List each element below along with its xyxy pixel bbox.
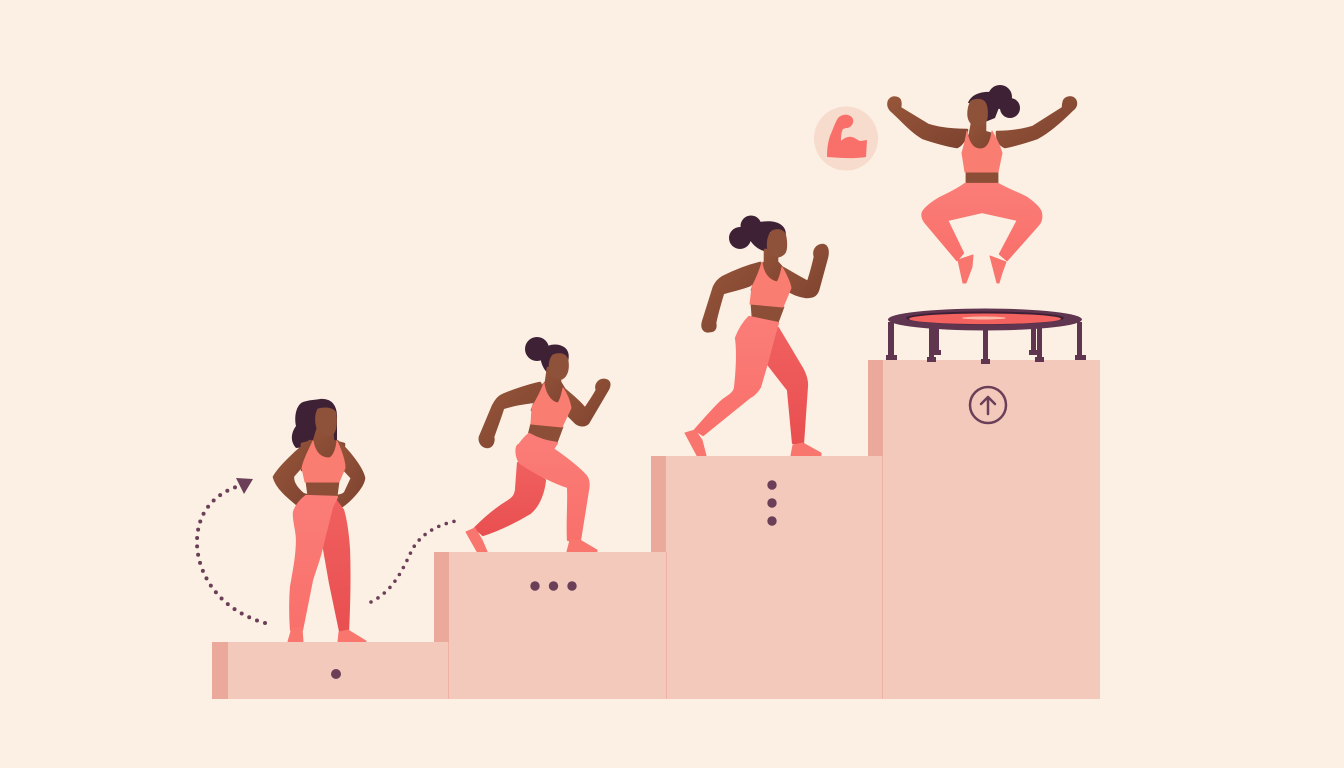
step 1 block <box>212 642 435 699</box>
front arm <box>564 380 609 425</box>
trampoline frame <box>888 308 1082 330</box>
step 3 marker: three vertical dots <box>767 480 777 526</box>
feet <box>288 628 366 642</box>
sports bra <box>750 262 791 307</box>
trampoline legs <box>886 322 1086 364</box>
sports bra <box>962 131 1002 172</box>
right arm <box>333 441 364 506</box>
feet <box>958 255 1006 283</box>
front leg <box>695 317 778 435</box>
back leg <box>767 328 807 443</box>
neck and torso <box>532 368 571 410</box>
figure 1: standing hands on hips <box>274 399 366 642</box>
step 1 marker: one dot <box>331 669 341 679</box>
back leg <box>475 463 545 535</box>
face <box>316 408 336 436</box>
face <box>549 354 568 379</box>
face <box>968 99 987 126</box>
hair <box>292 399 337 448</box>
trampoline mat <box>909 314 1061 324</box>
feet <box>685 430 821 456</box>
trampoline <box>886 308 1086 364</box>
feet <box>466 528 597 552</box>
step 2 block <box>434 552 652 699</box>
mat highlight <box>962 316 1006 320</box>
figure 3: striding up <box>685 216 828 456</box>
dotted curve between first and second figure <box>371 521 456 602</box>
step 2 marker: three dots <box>530 581 577 591</box>
hair <box>968 85 1020 122</box>
neck and torso <box>752 250 791 290</box>
left arm <box>888 98 967 147</box>
midriff <box>966 172 998 186</box>
sports bra <box>531 383 571 427</box>
back arm <box>703 263 760 331</box>
hair <box>525 337 569 375</box>
back arm <box>480 383 541 447</box>
left arm <box>274 441 316 506</box>
step 3 block <box>651 456 868 699</box>
face <box>767 230 787 257</box>
dotted curved arrow around first figure <box>197 478 265 623</box>
neck and torso <box>964 118 1000 150</box>
hair <box>729 216 786 252</box>
right arm <box>997 97 1076 147</box>
step 4 marker: up arrow in circle <box>970 387 1006 423</box>
step 4 block <box>868 360 1100 699</box>
figure 4: jumping above trampoline <box>888 85 1076 283</box>
leggings <box>922 184 1041 260</box>
midriff <box>528 423 563 443</box>
back leg <box>323 498 349 631</box>
midriff <box>751 304 784 323</box>
figure 2: stepping up <box>466 337 609 552</box>
front leg <box>290 496 337 630</box>
sports bra <box>302 441 345 482</box>
midriff <box>306 482 339 497</box>
trampoline mat rim <box>906 312 1064 324</box>
front arm <box>783 245 828 297</box>
neck and shoulders <box>302 428 344 470</box>
icon: flexed muscle badge <box>814 106 878 170</box>
front leg <box>516 434 589 540</box>
